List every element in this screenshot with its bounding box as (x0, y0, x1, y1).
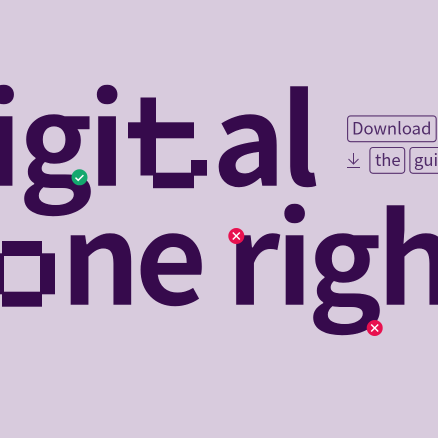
letter l: l (280, 41, 319, 222)
icon: download arrow (347, 153, 360, 168)
letter n: n (60, 160, 141, 341)
tag: the: the (375, 147, 401, 171)
badge: green check (72, 169, 88, 185)
letter i: i (276, 160, 314, 341)
blocky letter o (0, 241, 55, 307)
heading line 2: done right (0, 160, 438, 341)
letter i: i (88, 41, 126, 222)
tag: the (370, 147, 405, 173)
badge: red cross (228, 228, 244, 244)
letter r: r (226, 160, 281, 341)
badge: red cross lower (367, 320, 383, 336)
letter g: g (18, 41, 93, 222)
tag: Download: Download (352, 116, 431, 140)
letter e: e (135, 160, 207, 341)
letter a: a (212, 41, 286, 222)
letter g: g (308, 160, 382, 341)
blocky letter t (128, 98, 207, 188)
heading line 1: digital (0, 41, 319, 222)
